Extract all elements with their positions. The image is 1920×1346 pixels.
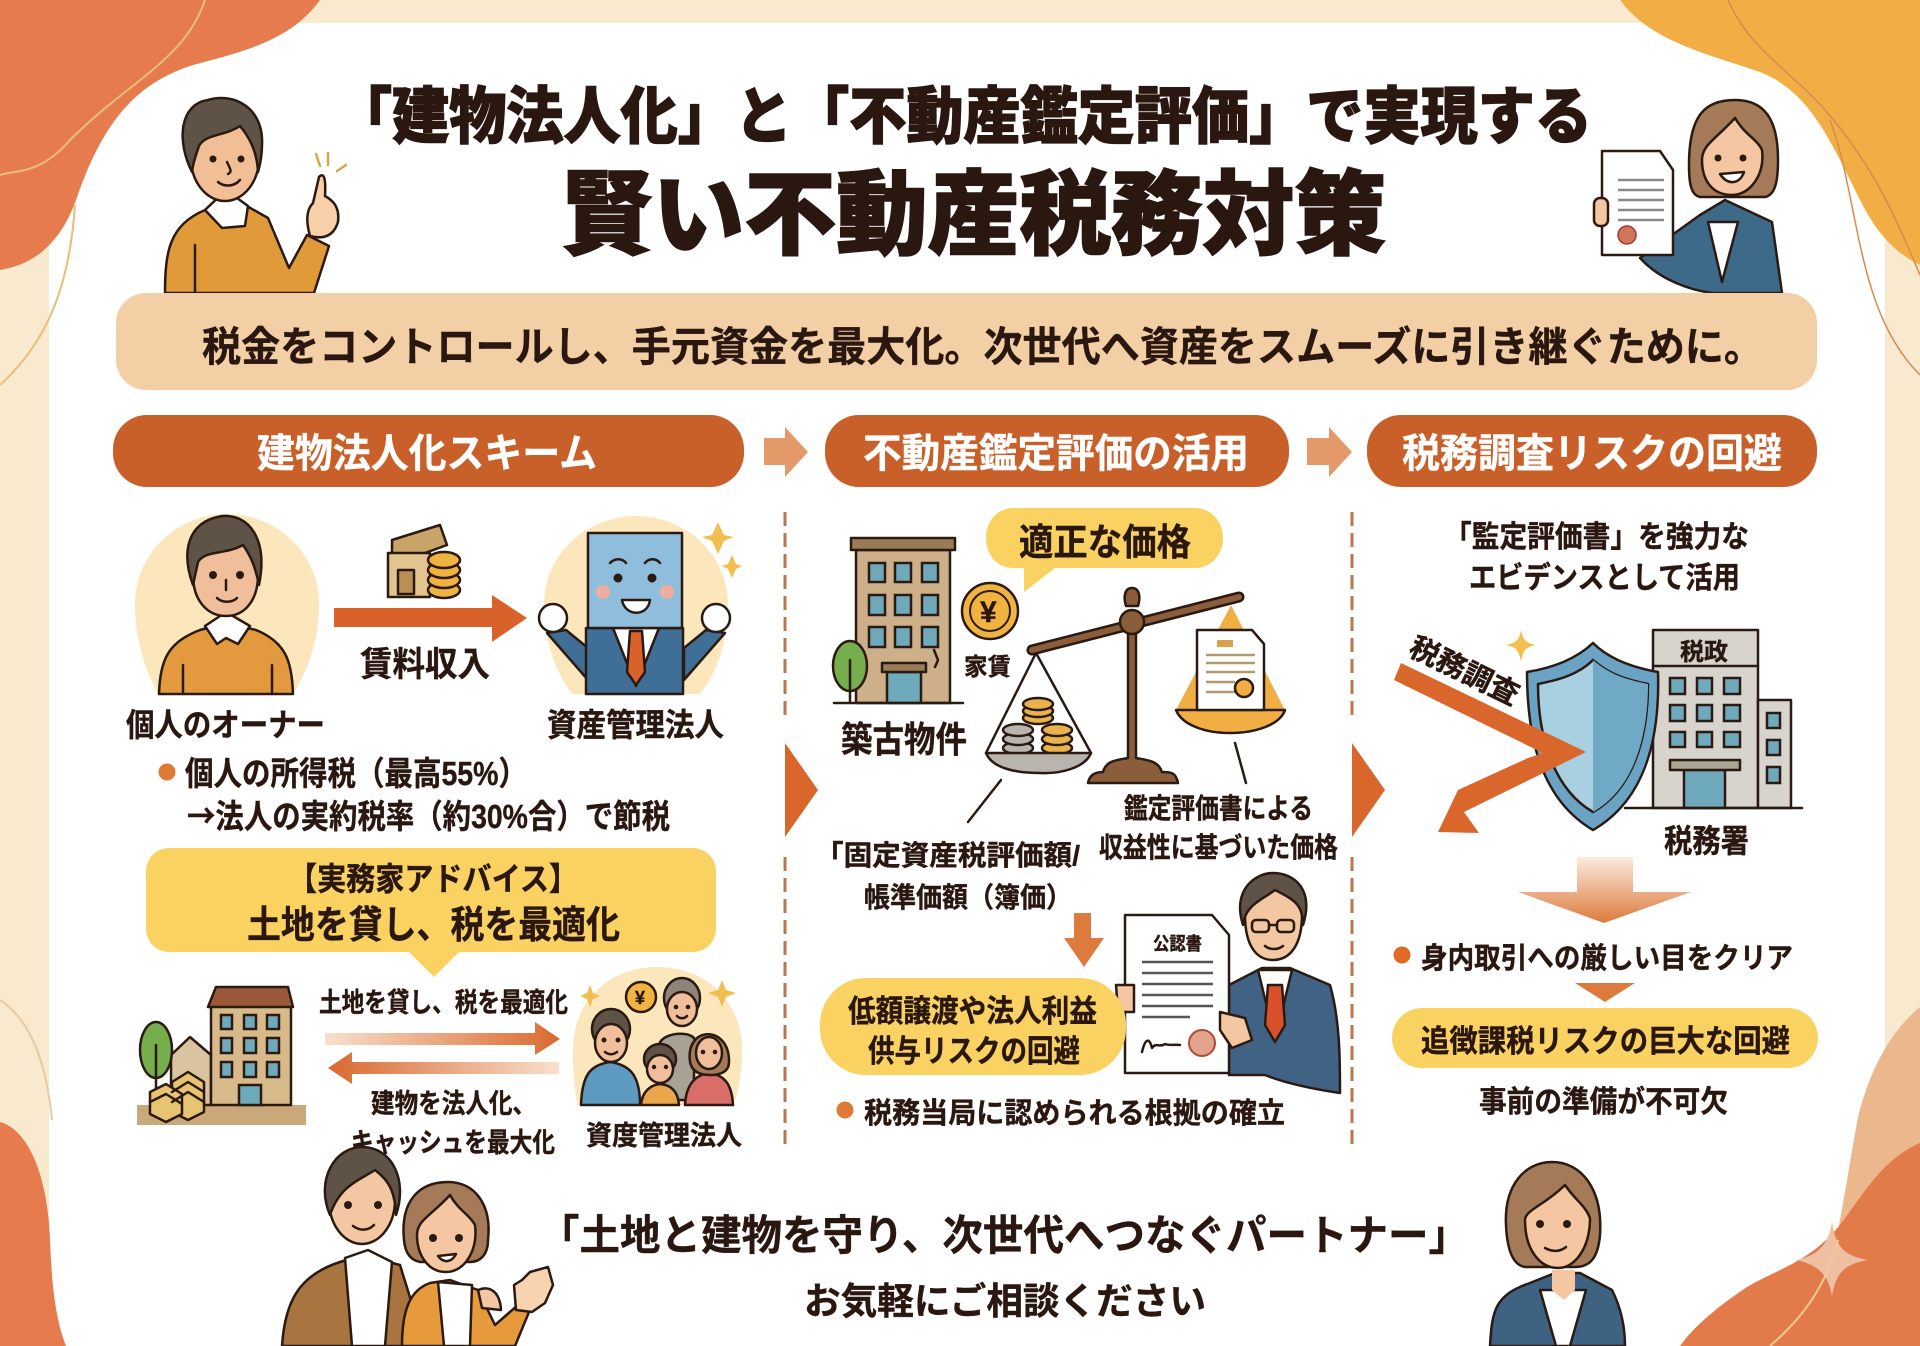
header pill: appraisal [825, 415, 1289, 487]
text: appraisal evidence [1444, 521, 1749, 595]
decorative blob: top left [0, 0, 320, 385]
header pill: scheme [113, 415, 744, 487]
arrow: left flow [328, 1052, 559, 1084]
divider with arrow: right [1352, 512, 1385, 1147]
icon: shield [1527, 643, 1658, 830]
icon: individual owner [135, 514, 319, 694]
decorative blob: bottom right [1680, 1007, 1920, 1346]
panel: appraisal column [815, 508, 1340, 1130]
arrow: down to risk pill [1064, 913, 1104, 967]
arrow: rent flow [334, 595, 527, 642]
illustration: professional with certificate [1116, 873, 1340, 1093]
icon: land, building and money [137, 987, 306, 1125]
icon: asset management company character [539, 516, 742, 694]
icon: balance scale [986, 588, 1285, 783]
woman [685, 1034, 733, 1105]
banner: subtitle: 税金をコントロールし、手元資金を最大化。次世代へ資産をスムーズに引き継ぐために。 [202, 324, 1763, 370]
bullet: authority-recognized basis: 税務当局に認められる根拠の確立 [864, 1097, 1285, 1130]
back man [659, 978, 700, 1100]
pill: low-price transfer risk: 供与リスクの回避 [868, 1034, 1080, 1069]
label: tax audit: 税務調査 [1404, 631, 1524, 712]
label: income-based price: 収益性に基づいた価格 [1099, 832, 1338, 863]
header pill: audit risk: 税務調査リスクの回避 [1402, 432, 1782, 476]
icon: tax office building [1625, 630, 1802, 808]
bullet: tax rate comparison: →法人の実約税率（約30%合）で節税 [187, 790, 670, 838]
label: old property: 築古物件 [841, 719, 967, 760]
callout: appropriate price [986, 508, 1223, 592]
leader line: left pan [968, 780, 1001, 822]
label: maximize cash: キャッシュを最大化 [351, 1128, 555, 1158]
header pill: appraisal: 不動産鑑定評価の活用 [863, 432, 1249, 476]
callout: practitioner advice: 【実務家アドバイス】 [288, 861, 578, 897]
label: rent income: 賃料収入 [360, 646, 490, 684]
arrow: small down triangle [1575, 983, 1635, 1002]
icon: tax office building: 税政 [1680, 639, 1728, 666]
label: asset management company: 資産管理法人 [547, 707, 724, 743]
label: asset company family: 資度管理法人 [586, 1121, 742, 1151]
closing call to action: お気軽にご相談ください [804, 1281, 1206, 1322]
pill: low-price transfer risk [820, 978, 1126, 1075]
callout: practitioner advice [146, 848, 716, 977]
icon: yen coin [962, 583, 1018, 639]
bullet: tax rate comparison [158, 755, 670, 838]
callout: practitioner advice: 土地を貸し、税を最適化 [247, 905, 620, 947]
pill: low-price transfer risk: 低額譲渡や法人利益 [848, 994, 1097, 1029]
illustration: man pointing [165, 98, 346, 293]
panel: audit risk column [1392, 521, 1818, 1119]
label: appraisal price: 鑑定評価書による [1124, 793, 1313, 824]
label: book value: 帳準価額（簿価） [864, 882, 1072, 913]
pill: back-tax risk: 追徴課税リスクの巨大な回避 [1421, 1024, 1790, 1059]
arrow: header 2 to 3 [1307, 427, 1352, 477]
text: preparation essential: 事前の準備が不可欠 [1479, 1085, 1728, 1119]
icon: rent money and coins [388, 525, 460, 598]
icon: old building [833, 538, 963, 703]
title line 1: 「建物法人化」と「不動産鑑定評価」で実現する [335, 83, 1592, 152]
text: appraisal evidence: 「監定評価書」を強力な [1444, 521, 1749, 554]
icon: family group [573, 967, 742, 1105]
divider with arrow: left [785, 512, 818, 1147]
illustration: couple [282, 1147, 553, 1346]
left man [581, 1009, 640, 1105]
illustration: woman holding document [1594, 100, 1782, 293]
illustration: professional with certificate: 公認書 [1153, 933, 1202, 954]
decorative blob: top right [1620, 0, 1920, 375]
icon: yen coin: ¥ [980, 596, 997, 629]
banner: subtitle [116, 293, 1817, 390]
label: tax office: 税務署 [1664, 823, 1749, 859]
label: lend land: 土地を貸し、税を最適化 [319, 988, 568, 1018]
label: incorporate building: 建物を法人化、 [371, 1089, 536, 1119]
decorative blob: bottom left [0, 1000, 66, 1346]
header pill: scheme: 建物法人化スキーム [257, 432, 597, 476]
arrow: right flow [325, 1022, 560, 1055]
illustration: consultant woman [1490, 1162, 1625, 1346]
pill: back-tax risk [1392, 1008, 1818, 1068]
icon: sparkle [1506, 630, 1536, 662]
arrow: big down arrow [1518, 857, 1691, 923]
callout: appropriate price: 適正な価格 [1019, 522, 1191, 563]
label: individual owner: 個人のオーナー [126, 707, 325, 743]
text: appraisal evidence: エビデンスとして活用 [1469, 561, 1740, 595]
icon: family group: ¥ [635, 988, 645, 1008]
leader line: right pan [1235, 743, 1246, 783]
bullet: related-party transactions: 身内取引への厳しい目をクリア [1421, 942, 1793, 975]
child [641, 1044, 679, 1105]
header pill: audit risk [1367, 415, 1817, 487]
label: rent: 家賃 [964, 654, 1011, 681]
arrow: header 1 to 2 [764, 427, 808, 477]
title line 2: 賢い不動産税務対策 [561, 165, 1386, 267]
panel: scheme column [126, 514, 742, 1158]
label: assessed value: 「固定資産税評価額/ [815, 840, 1080, 871]
closing message: 「土地と建物を守り、次世代へつなぐパートナー」 [539, 1212, 1469, 1259]
arrow: audit deflected by shield [1394, 663, 1586, 833]
bullet: tax rate comparison: 個人の所得税（最高55%） [185, 755, 527, 792]
